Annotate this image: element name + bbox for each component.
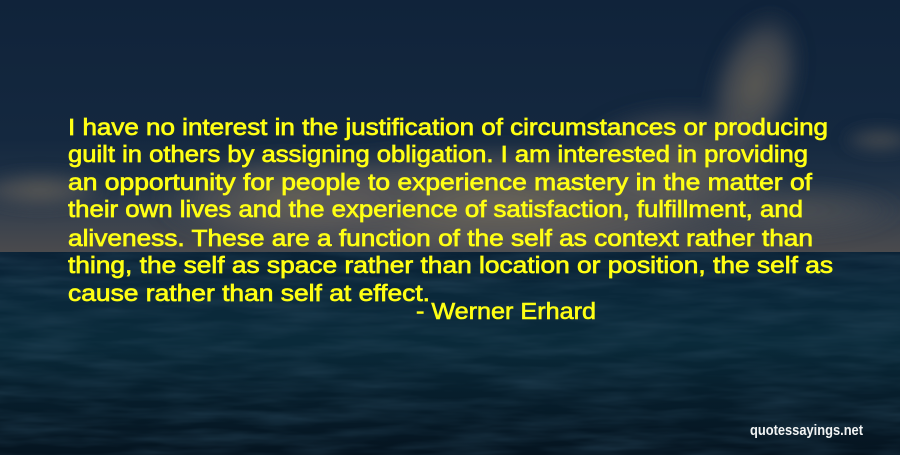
watermark: quotessayings.net: [750, 422, 863, 439]
background: sea waves: [0, 252, 900, 455]
background: dark sea: [0, 252, 900, 455]
quote text: guilt in others by assigning obligation. I am interested in providing: [68, 141, 808, 167]
quote text: an opportunity for people to experience mastery in the matter of: [68, 169, 813, 195]
background: evening sky: [0, 0, 900, 252]
quote text: aliveness. These are a function of the self as context rather than: [68, 225, 813, 251]
quote text: cause rather than self at effect.: [68, 280, 430, 306]
attribution: - Werner Erhard: [416, 298, 596, 324]
quote text: their own lives and the experience of satisfaction, fulfillment, and: [68, 196, 803, 222]
quote text: [68, 114, 833, 306]
quote text: I have no interest in the justification of circumstances or producing: [68, 114, 828, 140]
background: clouds: [0, 0, 900, 271]
quote text: thing, the self as space rather than location or position, the self as: [68, 252, 833, 278]
